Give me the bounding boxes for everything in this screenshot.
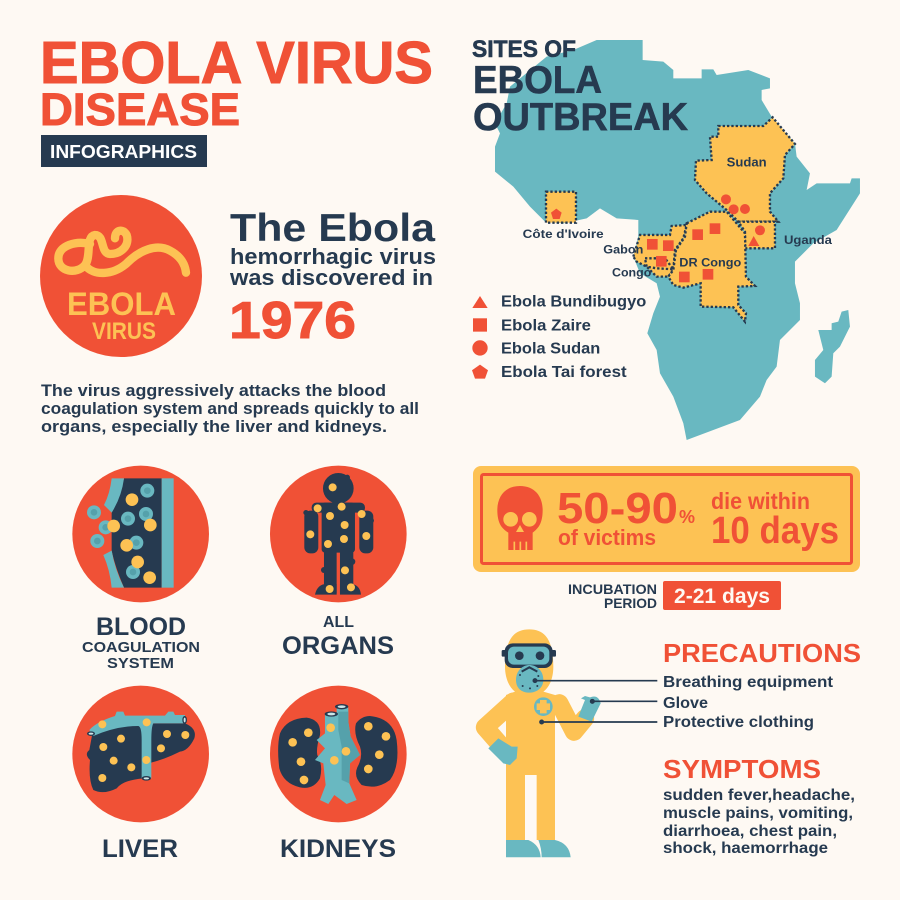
precautions: Glove <box>663 695 708 712</box>
label: blood coagulation system <box>82 613 200 672</box>
label: blood coagulation system: COAGULATION <box>82 639 200 656</box>
label: blood coagulation system: BLOOD <box>96 613 186 641</box>
legend: Ebola Tai forest <box>501 364 627 381</box>
fatality text: 50-90 <box>557 484 678 533</box>
map heading: EBOLA <box>473 59 602 102</box>
description paragraph: The virus aggressively attacks the blood <box>41 381 386 400</box>
outbreak countries <box>546 117 795 322</box>
description paragraph <box>41 381 419 436</box>
fatality text: die within <box>711 488 810 514</box>
discovery text: was discovered in <box>229 265 433 290</box>
fatality text <box>557 484 839 552</box>
africa landmass <box>495 40 860 440</box>
legend: Ebola Zaire <box>501 318 591 335</box>
symptoms <box>663 754 855 857</box>
map heading: OUTBREAK <box>473 96 688 139</box>
label: kidneys: KIDNEYS <box>280 835 396 863</box>
icon: ebola virus strand <box>58 231 186 273</box>
country labels: Congo <box>612 266 652 280</box>
illustration: person in protective suit <box>485 629 657 857</box>
precautions: Protective clothing <box>663 714 814 731</box>
discovery text: The Ebola <box>230 207 435 250</box>
chest emblem <box>534 697 553 716</box>
legend: Ebola Bundibugyo <box>501 294 646 311</box>
country labels: DR Congo <box>679 255 742 269</box>
symptoms: shock, haemorrhage <box>663 840 828 857</box>
fatality text: 10 days <box>711 510 839 552</box>
badge: ebola virus <box>40 195 202 357</box>
fatality text: of victims <box>558 525 656 550</box>
suit <box>505 629 555 840</box>
legend <box>472 294 646 381</box>
title: DISEASE <box>40 84 240 135</box>
infographics tag <box>41 135 207 167</box>
incubation period <box>568 581 781 611</box>
incubation period: PERIOD <box>604 595 657 611</box>
icon: blood coagulation <box>72 466 209 602</box>
icon: skull <box>497 486 543 550</box>
label: liver: LIVER <box>102 835 178 863</box>
label: blood coagulation system: SYSTEM <box>107 655 174 672</box>
label: all organs: ORGANS <box>282 632 394 660</box>
incubation period: INCUBATION <box>568 581 657 597</box>
badge text: VIRUS <box>92 318 156 345</box>
fatality text: % <box>679 507 695 527</box>
country labels: Sudan <box>727 156 767 170</box>
symptoms: muscle pains, vomiting, <box>663 805 853 822</box>
respirator mask <box>516 665 543 693</box>
title: EBOLA VIRUS <box>40 30 433 96</box>
precautions <box>663 638 861 731</box>
country labels: Uganda <box>784 233 832 247</box>
precautions: PRECAUTIONS <box>663 638 861 668</box>
country labels: Gabon <box>603 243 643 257</box>
icon: all organs body <box>270 466 407 602</box>
incubation period: 2-21 days <box>674 585 770 608</box>
country labels <box>523 156 832 280</box>
madagascar <box>815 310 850 383</box>
symptoms: diarrhoea, chest pain, <box>663 823 837 840</box>
description paragraph: organs, especially the liver and kidneys. <box>41 417 387 436</box>
boots <box>506 840 571 857</box>
discovery text: 1976 <box>229 292 356 350</box>
symptoms: sudden fever,headache, <box>663 787 855 804</box>
infographics tag: INFOGRAPHICS <box>50 142 197 162</box>
outbreak markers <box>551 194 765 282</box>
map heading: SITES OF <box>472 36 576 63</box>
precautions: Breathing equipment <box>663 674 834 691</box>
discovery text <box>229 207 436 350</box>
map: africa outbreak sites <box>472 40 860 440</box>
label: all organs <box>282 614 394 660</box>
gloves <box>488 696 601 765</box>
icon: liver <box>72 686 209 822</box>
goggles <box>502 650 556 657</box>
legend: Ebola Sudan <box>501 341 600 358</box>
symptoms: SYMPTOMS <box>663 754 821 784</box>
callout lines <box>533 679 657 724</box>
label: all organs: ALL <box>323 614 354 631</box>
banner: fatality rate <box>473 466 860 572</box>
badge text <box>67 286 176 345</box>
description paragraph: coagulation system and spreads quickly to all <box>41 399 419 418</box>
country labels: Côte d'Ivoire <box>523 227 604 241</box>
map heading <box>472 36 688 139</box>
icon: kidneys <box>270 686 407 822</box>
title <box>40 30 433 135</box>
discovery text: hemorrhagic virus <box>230 244 436 269</box>
badge text: EBOLA <box>67 286 176 322</box>
